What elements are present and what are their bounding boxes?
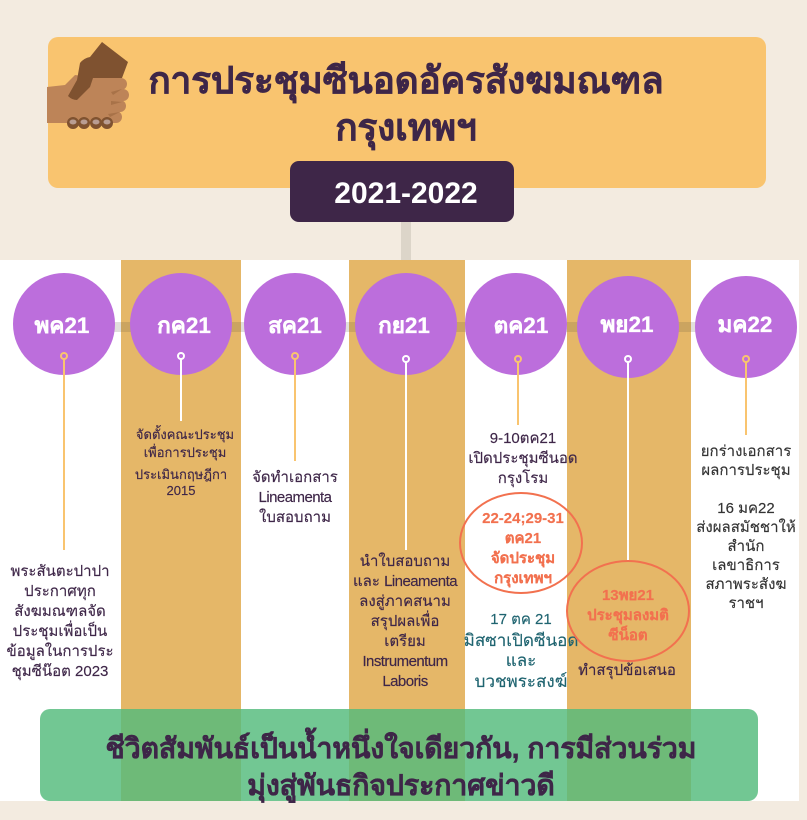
connector dot: July	[177, 352, 185, 360]
text: Mass opening: บวชพระสงฆ์	[475, 672, 567, 690]
text: October opening	[468, 430, 578, 488]
header panel	[48, 37, 766, 188]
text: September	[353, 552, 458, 690]
text: Bangkok meeting: ตค21	[505, 530, 541, 547]
text: Bangkok meeting	[482, 510, 564, 588]
text: January: ยกร่างเอกสาร	[701, 443, 791, 460]
month circle: กย21: กย21	[378, 313, 430, 338]
month circle: พค21	[13, 273, 115, 375]
text: May: ข้อมูลในการประ	[6, 643, 114, 660]
text: January	[696, 443, 796, 612]
text: November vote	[587, 587, 669, 644]
month circle: พย21	[577, 276, 679, 378]
connector line: January	[745, 361, 747, 435]
text: July date: ประเมินกฤษฎีกา	[135, 467, 227, 482]
timeline band	[64, 322, 746, 332]
year badge: 2021-2022	[334, 177, 478, 210]
text: September: ลงสู่ภาคสนาม	[359, 593, 451, 610]
text: January: เลขาธิการ	[712, 557, 780, 574]
text: Bangkok meeting: กรุงเทพฯ	[494, 570, 552, 587]
text: Mass opening: 17 ตค 21	[490, 611, 552, 628]
text: August	[252, 469, 338, 526]
text: July: เพื่อการประชุม	[144, 445, 226, 460]
year badge	[290, 161, 514, 222]
text: September: สรุปผลเพื่อ	[371, 613, 439, 630]
text: January: สำนัก	[728, 538, 764, 555]
connector dot: September	[402, 355, 410, 363]
connector dot: January	[742, 355, 750, 363]
text: November vote: ซีน็อต	[608, 627, 648, 644]
text: October opening: 9-10ตค21	[490, 430, 556, 447]
text: May: พระสันตะปาปา	[10, 563, 110, 580]
text: January: ผลการประชุม	[701, 462, 791, 479]
month circle: มค22: มค22	[718, 312, 772, 337]
text: January: ราชฯ	[728, 595, 764, 612]
text: October opening: กรุงโรม	[498, 470, 548, 487]
month circle: สค21: สค21	[268, 313, 322, 338]
text: Mass opening: มิสซาเปิดซีนอด	[464, 630, 578, 650]
connector line: October	[517, 361, 519, 425]
text: November vote: ประชุมลงมติ	[587, 607, 669, 624]
connector dot: November	[624, 355, 632, 363]
text: Bangkok meeting: 22-24;29-31	[482, 510, 564, 527]
title	[148, 60, 664, 150]
text: September: นำใบสอบถาม	[360, 553, 450, 570]
text: August: ใบสอบถาม	[259, 509, 331, 526]
text: July date	[135, 467, 227, 498]
text: January: สภาพระสังฆ	[705, 576, 787, 593]
text: July date: 2015	[167, 483, 195, 498]
gold column: September	[349, 260, 465, 801]
gold column: July	[121, 260, 241, 801]
connector line: May	[63, 358, 65, 550]
text: January: ส่งผลสมัชชาให้	[696, 519, 796, 536]
gold column: November	[567, 260, 691, 801]
green banner	[40, 709, 758, 801]
text: November summary: ทำสรุปข้อเสนอ	[578, 662, 676, 679]
text: May	[6, 563, 114, 680]
banner text: ชีวิตสัมพันธ์เป็นน้ำหนึ่งใจเดียวกัน, การมีส่วนร่วม	[106, 732, 696, 764]
month circle: พค21: พค21	[35, 313, 89, 338]
title: การประชุมซีนอดอัครสังฆมณฑล	[148, 60, 664, 101]
text: January: 16 มค22	[717, 500, 775, 517]
month circle: มค22	[695, 276, 797, 378]
text: August: Lineamenta	[259, 489, 331, 506]
text: November vote: 13พย21	[602, 587, 654, 604]
text: Mass opening	[464, 611, 578, 690]
text: May: ประกาศทุก	[24, 583, 96, 600]
month circle: ตค21: ตค21	[494, 313, 548, 338]
text: May: ประชุมเพื่อเป็น	[13, 623, 107, 640]
text: October opening: เปิดประชุมซีนอด	[468, 450, 578, 467]
connector line: August	[294, 358, 296, 461]
text: August: จัดทำเอกสาร	[252, 469, 338, 486]
icon: handshake	[47, 42, 129, 129]
white timeline panel	[0, 260, 799, 801]
connector dot: August	[291, 352, 299, 360]
stem connector	[401, 222, 411, 260]
text: September: Instrumentum	[362, 653, 448, 670]
connector dot: October	[514, 355, 522, 363]
connector line: November	[627, 361, 629, 560]
month circle: พย21: พย21	[600, 312, 654, 337]
text: September: เตรียม	[384, 633, 426, 650]
text: July: จัดตั้งคณะประชุม	[136, 427, 234, 442]
text: Bangkok meeting: จัดประชุม	[491, 550, 555, 567]
banner text: มุ่งสู่พันธกิจประกาศข่าวดี	[247, 769, 555, 801]
month circle: กย21	[355, 273, 457, 375]
text: May: ชุมซีน๊อต 2023	[12, 663, 108, 680]
callout: Bangkok meeting	[459, 492, 583, 594]
text: September: Laboris	[382, 673, 428, 690]
month circle: กค21: กค21	[157, 313, 211, 338]
month circle: สค21	[244, 273, 346, 375]
text: September: และ Lineamenta	[353, 573, 457, 590]
callout: November vote	[566, 560, 690, 662]
text: Mass opening: และ	[506, 651, 536, 670]
connector dot: May	[60, 352, 68, 360]
banner text	[106, 727, 696, 803]
connector line: July	[180, 358, 182, 421]
month circle: ตค21	[465, 273, 567, 375]
month circle: กค21	[130, 273, 232, 375]
text: July	[136, 425, 234, 460]
connector line: September	[405, 361, 407, 550]
text: May: สังฆมณฑลจัด	[14, 603, 106, 620]
title: กรุงเทพฯ	[335, 107, 477, 148]
